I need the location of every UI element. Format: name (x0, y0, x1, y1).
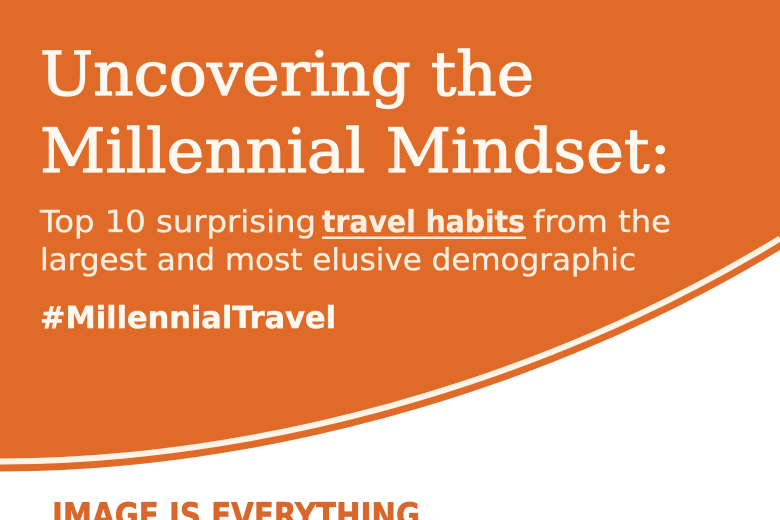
subtitle (39, 205, 671, 278)
emphasised phrase: travel habits: travel habits (322, 205, 525, 240)
subtitle: largest and most elusive demographic (40, 243, 636, 278)
title: Uncovering the (40, 39, 534, 110)
title (40, 39, 671, 187)
subtitle: from the (533, 205, 671, 240)
hashtag: #MillennialTravel (40, 301, 336, 336)
title: Millennial Mindset: (40, 116, 671, 187)
subtitle: Top 10 surprising (39, 205, 316, 240)
